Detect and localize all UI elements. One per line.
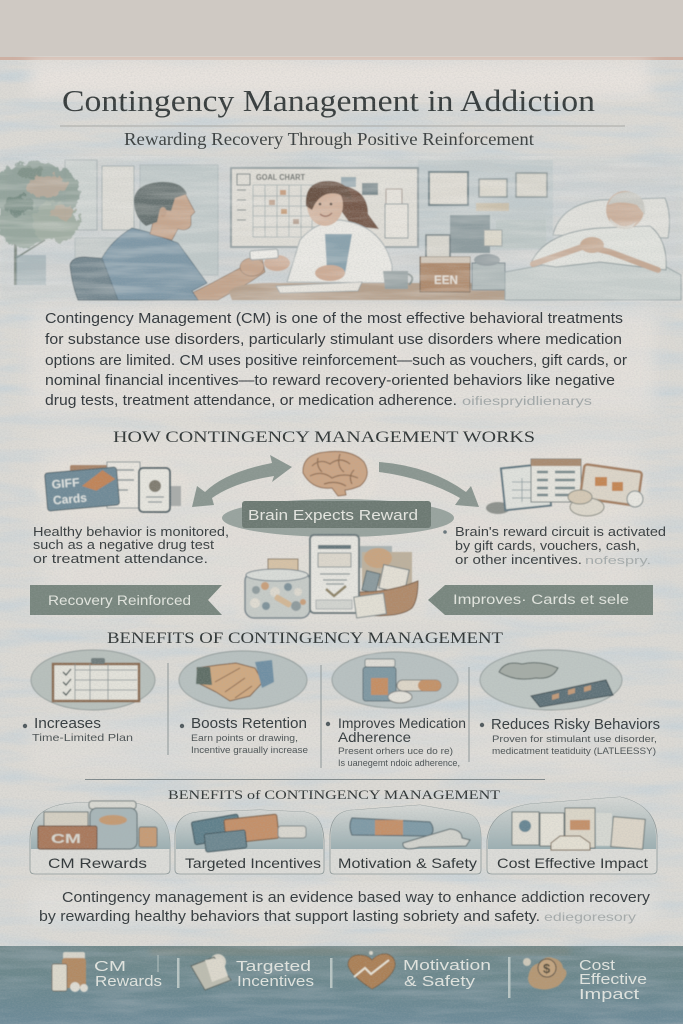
text: right reward circuit: Brain's reward circuit is activated [455,524,666,539]
panel: boosts retention: Earn points or drawing, [191,733,298,744]
icon: reports and car [512,808,645,850]
subtitle: Rewarding Recovery Through Positive Reinforcement [124,129,534,149]
footer item: cost effective impact: Cost [579,957,616,974]
glass jar [245,559,310,618]
card: cm rewards: CM Rewards [48,855,147,871]
arrow: brain to right [379,462,479,507]
icon: heart with trend line [348,951,395,989]
panel: improves medication adherence: Present orhers uce do re) [338,746,453,757]
goal chart board: GOAL CHART [256,173,305,182]
panel: improves medication adherence: Is uanegemt ndoic adherence, [338,758,460,769]
footer item: cost effective impact [523,957,647,1003]
icon: jar and reward box: CM [51,831,81,846]
illustration: reward jar, phone and basket [235,535,427,620]
panel: boosts retention: Incentive graually increase [191,745,308,756]
footer item: cm rewards: CM [94,958,126,975]
icon: booklet [191,954,231,990]
wall and windows [0,156,683,300]
icon: tray and cushions [480,650,622,710]
intro paragraph [45,311,627,409]
footer item: targeted incentives: Incentives [237,973,314,990]
closing statement [39,890,651,925]
phone [310,535,386,618]
bottom teal band [0,946,683,1024]
icon: pill bottle [332,652,458,708]
icon: gift cards [191,814,306,852]
text: left monitored [33,524,229,566]
icon: gift cards and phone [35,456,191,520]
heading: benefits second: BENEFITS of CONTINGENCY MANAGEMENT [168,787,500,802]
icon: medicine bottles [52,952,88,992]
card: cost effective impact [487,797,657,874]
banner: recovery reinforced: Recovery Reinforced [48,593,191,608]
panel: boosts retention: Boosts Retention [191,716,307,732]
pill: brain expects reward: Brain Expects Reward [248,508,418,524]
text: right reward circuit: by gift cards, vouchers, cash, [455,538,640,553]
icon: clipboard [31,650,155,710]
wash over scene [0,156,683,302]
footer item: targeted incentives [191,954,314,990]
panel: increases: Increases [34,716,101,732]
card: targeted incentives [175,810,324,874]
intro paragraph: Contingency Management (CM) is one of the most effective behavioral treatments [45,311,623,327]
footer item: motivation and safety: Motivation [403,957,491,974]
illustration: clinic scene [0,156,683,300]
icon: dollar coin blob: $ [543,961,551,976]
panel: reduces risky behaviors: Reduces Risky Behaviors [491,717,660,733]
intro paragraph: options are limited. CM uses positive reinforcement—such as vouchers, gift cards, or [45,353,627,369]
panel: reduces risky behaviors: Proven for stimulant use disorder, [492,734,657,745]
card: motivation and safety: Motivation & Safety [338,855,477,871]
card: cost effective impact: Cost Effective Impact [497,855,648,871]
footer item: motivation and safety: & Safety [404,973,476,990]
panel: boosts retention [179,651,308,756]
intro paragraph: drug tests, treatment attendance, or medication adherence. [45,393,457,409]
footer item: cost effective impact: Effective [579,971,647,988]
heading: benefits: BENEFITS OF CONTINGENCY MANAGEMENT [107,630,504,647]
panel: increases [23,650,155,744]
background: top beige band [0,0,683,57]
text: right reward circuit [443,524,666,567]
text: left monitored: or treatment attendance. [33,551,208,566]
text: left monitored: such as a negative drug test [33,537,214,552]
banner: recovery reinforced [30,585,222,615]
intro paragraph: oifiespryidlienarys [462,396,592,408]
banner: improves cards [428,585,653,615]
footer item: cm rewards [52,952,162,992]
panel: reduces risky behaviors: medicatment teatiduity (LATLEESSY) [492,746,656,757]
intro paragraph: nominal financial incentives—to reward recovery-oriented behaviors like negative [45,373,615,389]
patient in bed [505,191,681,300]
text: left monitored: Healthy behavior is monitored, [33,524,229,539]
intro paragraph: for substance use disorders, particularly stimulant use disorders where medication [45,332,622,348]
pill: brain expects reward [222,499,454,537]
table with items [229,254,512,300]
text: right reward circuit: or other incentives. [455,552,582,567]
man holding card [70,182,265,300]
brain [294,447,378,511]
card: cm rewards [30,801,170,874]
arrow: brain to left [192,455,292,507]
wall certificates [426,172,547,260]
title: Contingency Management in Addiction [62,83,596,118]
footer item: targeted incentives: Targeted [236,958,311,975]
icon: handshake [179,651,307,709]
panel: reduces risky behaviors [480,650,660,757]
panel: improves medication adherence: Improves Medication [338,715,466,731]
card: targeted incentives: Targeted Incentives [185,855,321,871]
icon: gift cards and phone: GIFF [51,475,80,492]
text: right reward circuit: nofespry. [585,555,651,567]
panel: increases: Time-Limited Plan [32,732,133,744]
icon: calendar, chart and tablet [486,456,648,520]
panel: improves medication adherence [326,652,466,769]
closing statement: Contingency management is an evidence based way to enhance addiction recovery [62,890,651,906]
footer item: cost effective impact: Impact [579,986,640,1003]
heading: how it works: HOW CONTINGENCY MANAGEMENT WORKS [113,429,535,446]
papers in basket [358,546,418,616]
icon: rolled scroll [350,818,470,849]
footer item: motivation and safety [348,951,491,990]
closing statement: by rewarding healthy behaviors that support lasting sobriety and safety. [39,909,540,925]
goal chart board [231,168,418,247]
icon: gift cards and phone: Cards [52,491,88,508]
tree [0,162,80,285]
panel: improves medication adherence: Adherence [338,729,411,745]
card: motivation and safety [330,805,481,874]
closing statement: ediegoresory [544,910,636,924]
footer item: cm rewards: Rewards [95,973,162,990]
table with items: EEN [434,273,458,287]
woman in white coat [250,181,392,283]
banner: improves cards: Improves· Cards et sele [453,592,629,607]
